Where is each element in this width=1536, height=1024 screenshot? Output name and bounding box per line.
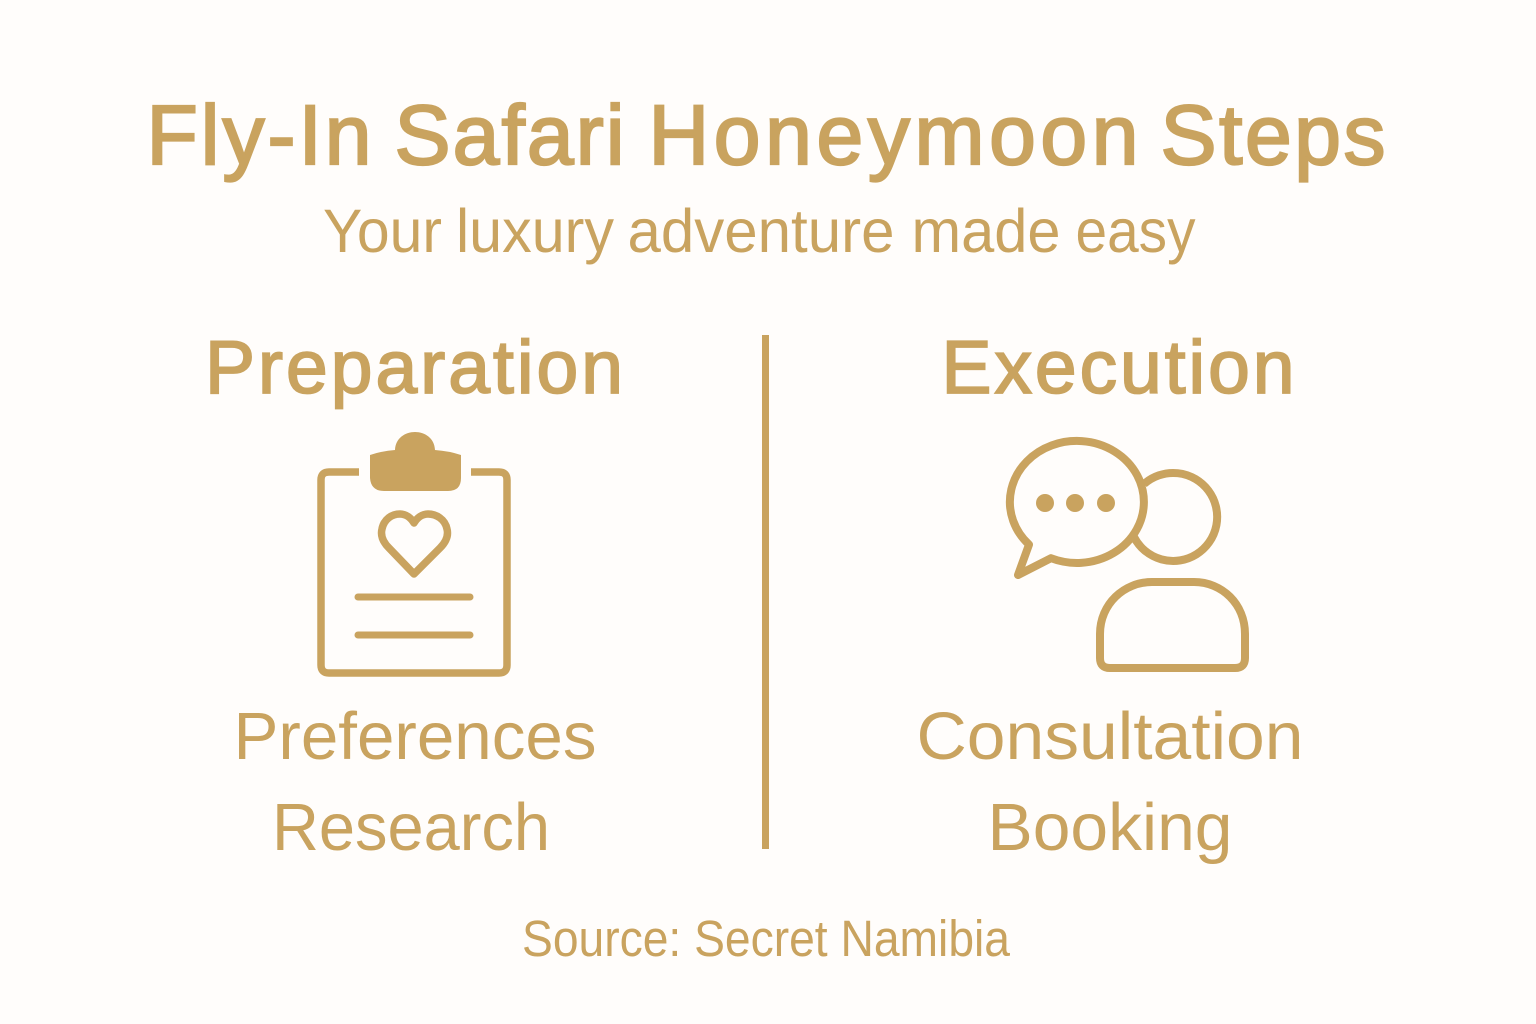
heading: Execution: Execution <box>942 325 1294 409</box>
source: Source: Secret Namibia <box>522 910 1011 967</box>
title: Honeymoon <box>648 88 1138 182</box>
title: Safari <box>394 88 624 182</box>
subtitle: luxury <box>456 197 614 265</box>
label: Consultation: Consultation <box>916 699 1304 774</box>
title: Steps <box>1160 88 1386 182</box>
subtitle: Your <box>323 197 442 265</box>
heading: Preparation: Preparation <box>205 325 623 409</box>
subtitle: adventure <box>628 197 894 265</box>
label: Preferences: Preferences <box>234 699 596 774</box>
subtitle: easy <box>1076 197 1196 265</box>
label: Booking: Booking <box>988 790 1232 865</box>
subtitle: made <box>912 197 1060 265</box>
subtitle <box>323 197 1196 265</box>
center divider <box>762 335 769 849</box>
icon: speech bubble and person <box>1010 441 1245 668</box>
title: Fly-In <box>146 88 372 182</box>
icon: clipboard with heart <box>321 432 507 673</box>
title <box>146 88 1386 182</box>
label: Research: Research <box>272 790 550 865</box>
